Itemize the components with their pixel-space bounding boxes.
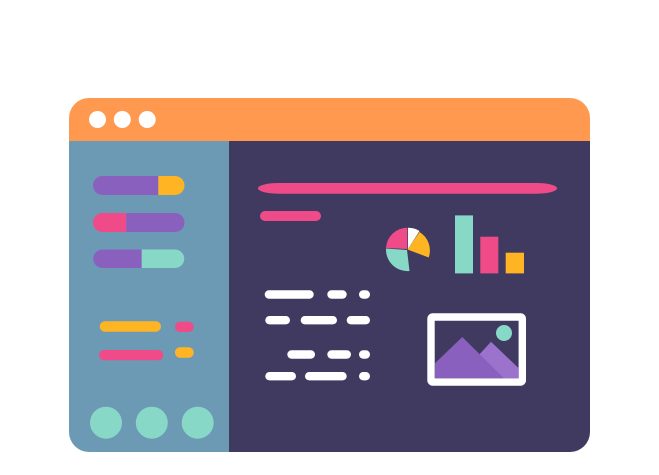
pie slice: pink — [386, 228, 407, 249]
button circle 2 — [136, 407, 168, 439]
text row 1 — [265, 290, 370, 299]
button circle 1 — [90, 407, 122, 439]
icon: window dot 3 — [139, 111, 156, 128]
sidebar legend rows — [99, 321, 194, 360]
panel: sidebar background — [69, 141, 229, 452]
image front mountain — [435, 337, 504, 378]
image sun — [496, 325, 512, 341]
bar chart — [455, 215, 524, 273]
sidebar progress bars — [93, 176, 184, 268]
progress bar: pink and purple — [93, 213, 184, 232]
panel: title bar — [69, 98, 590, 141]
text row 4 — [265, 372, 370, 380]
pie slice: white — [408, 228, 420, 249]
image back mountain — [480, 342, 519, 378]
text row 3 — [287, 350, 370, 359]
icon: window dot 2 — [114, 111, 131, 128]
sidebar teal circle buttons — [90, 407, 214, 439]
progress bar: purple and amber — [93, 176, 184, 195]
legend tag: amber short — [175, 347, 194, 358]
pie slice: amber — [408, 232, 430, 258]
bar: teal — [455, 215, 473, 273]
pie slice: teal — [386, 248, 410, 271]
heading bar: long pink — [258, 183, 557, 194]
text placeholder lines — [265, 290, 370, 380]
legend bar: pink long — [99, 350, 163, 360]
icon: image placeholder — [431, 317, 522, 382]
panel: main content background — [229, 141, 590, 452]
pie chart — [386, 228, 430, 271]
bar: amber — [506, 253, 524, 273]
legend bar: amber long — [100, 321, 161, 332]
subheading bar: short pink — [260, 211, 321, 221]
bar: pink — [480, 237, 498, 273]
legend tag: pink short — [175, 322, 194, 332]
button circle 3 — [182, 407, 214, 439]
icon: window dot 1 — [89, 111, 106, 128]
image frame — [431, 317, 522, 382]
text row 2 — [265, 316, 370, 324]
progress bar: purple and teal — [93, 250, 184, 268]
